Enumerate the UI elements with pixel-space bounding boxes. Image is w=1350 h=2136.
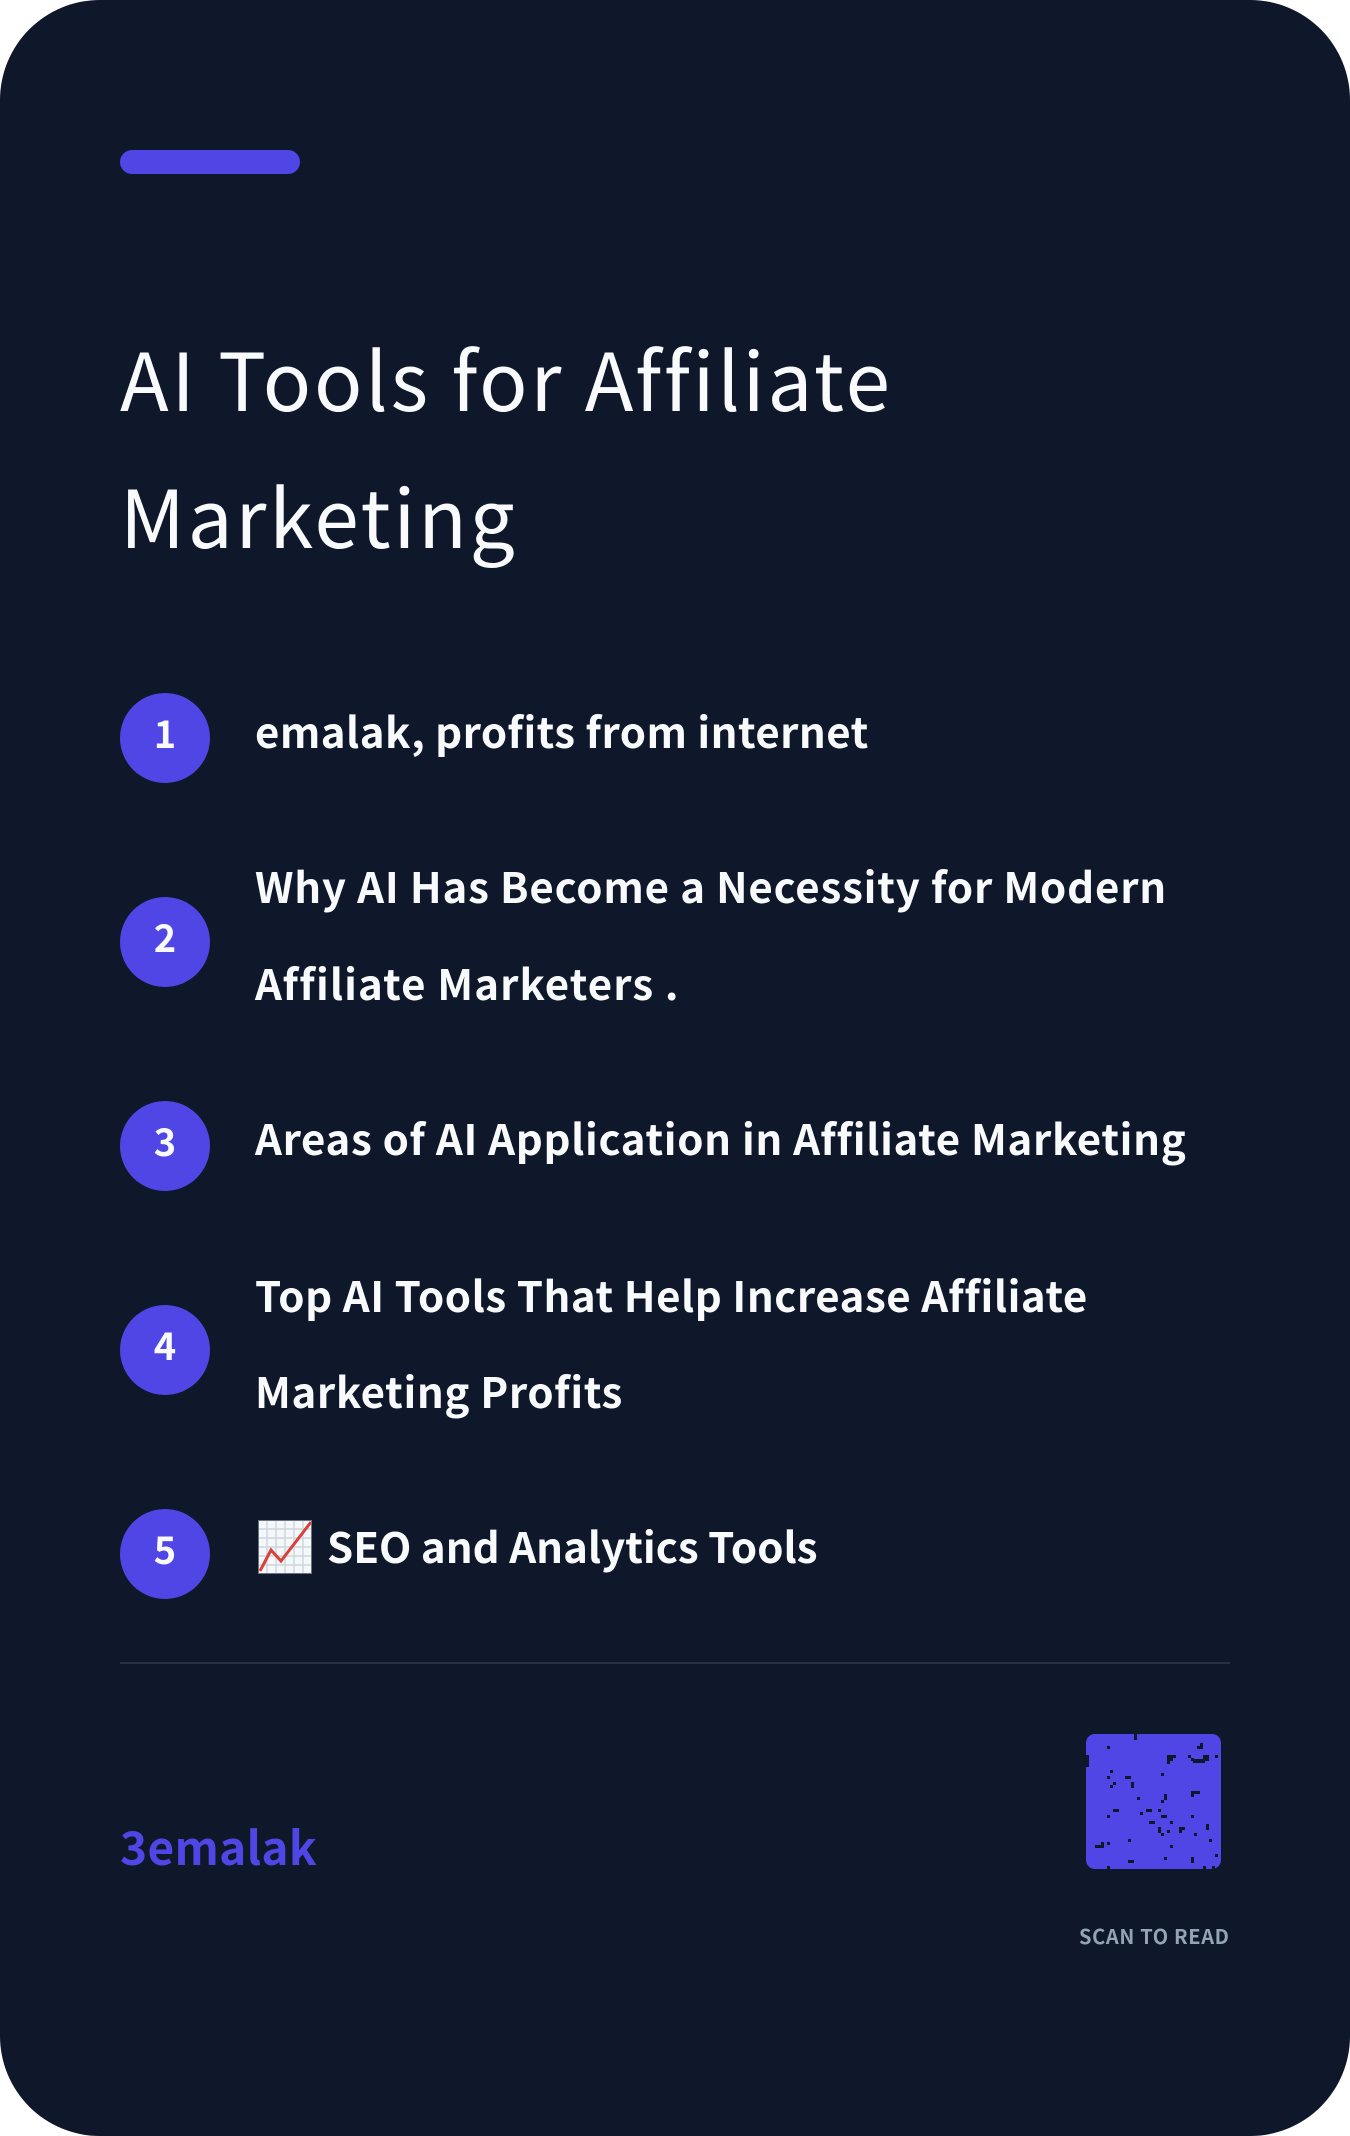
icon: chart with upward trend <box>258 1520 312 1574</box>
QR code <box>1086 1734 1221 1869</box>
number badge 5: 5 <box>154 1520 176 1575</box>
item 2 text <box>254 855 1167 1013</box>
item 4 text <box>255 1264 1088 1421</box>
item 4 text: Top AI Tools That Help Increase Affiliate <box>255 1264 1088 1325</box>
number badge 3 <box>120 1101 210 1191</box>
item 2 text: Why AI Has Become a Necessity for Modern <box>255 855 1167 916</box>
list item 3 <box>120 1101 1186 1191</box>
item 1 text: emalak, profits from internet <box>255 700 869 761</box>
number badge 1 <box>120 693 210 783</box>
number badge 5 <box>120 1509 210 1599</box>
number badge 2: 2 <box>154 908 176 963</box>
number badge 4 <box>120 1305 210 1395</box>
list item 2 <box>120 855 1167 1013</box>
item 5 text: SEO and Analytics Tools <box>327 1515 818 1576</box>
logo: 3emalak <box>120 1813 317 1879</box>
scan label: SCAN TO READ <box>1079 1921 1230 1950</box>
list item 5 <box>120 1509 818 1599</box>
number badge 3: 3 <box>154 1112 176 1167</box>
footer divider <box>120 1662 1230 1664</box>
number badge 2 <box>120 897 210 987</box>
title <box>120 319 893 572</box>
item 4 text: Marketing Profits <box>255 1360 623 1421</box>
list item 4 <box>120 1264 1088 1421</box>
accent bar <box>120 150 300 174</box>
title: Marketing <box>120 456 517 572</box>
number badge 4: 4 <box>154 1316 176 1371</box>
list item 1 <box>120 693 869 783</box>
number badge 1: 1 <box>154 704 176 759</box>
title: AI Tools for Affiliate <box>120 319 893 435</box>
item 3 text: Areas of AI Application in Affiliate Marketing <box>255 1107 1186 1168</box>
item 2 text: Affiliate Marketers . <box>255 952 680 1013</box>
